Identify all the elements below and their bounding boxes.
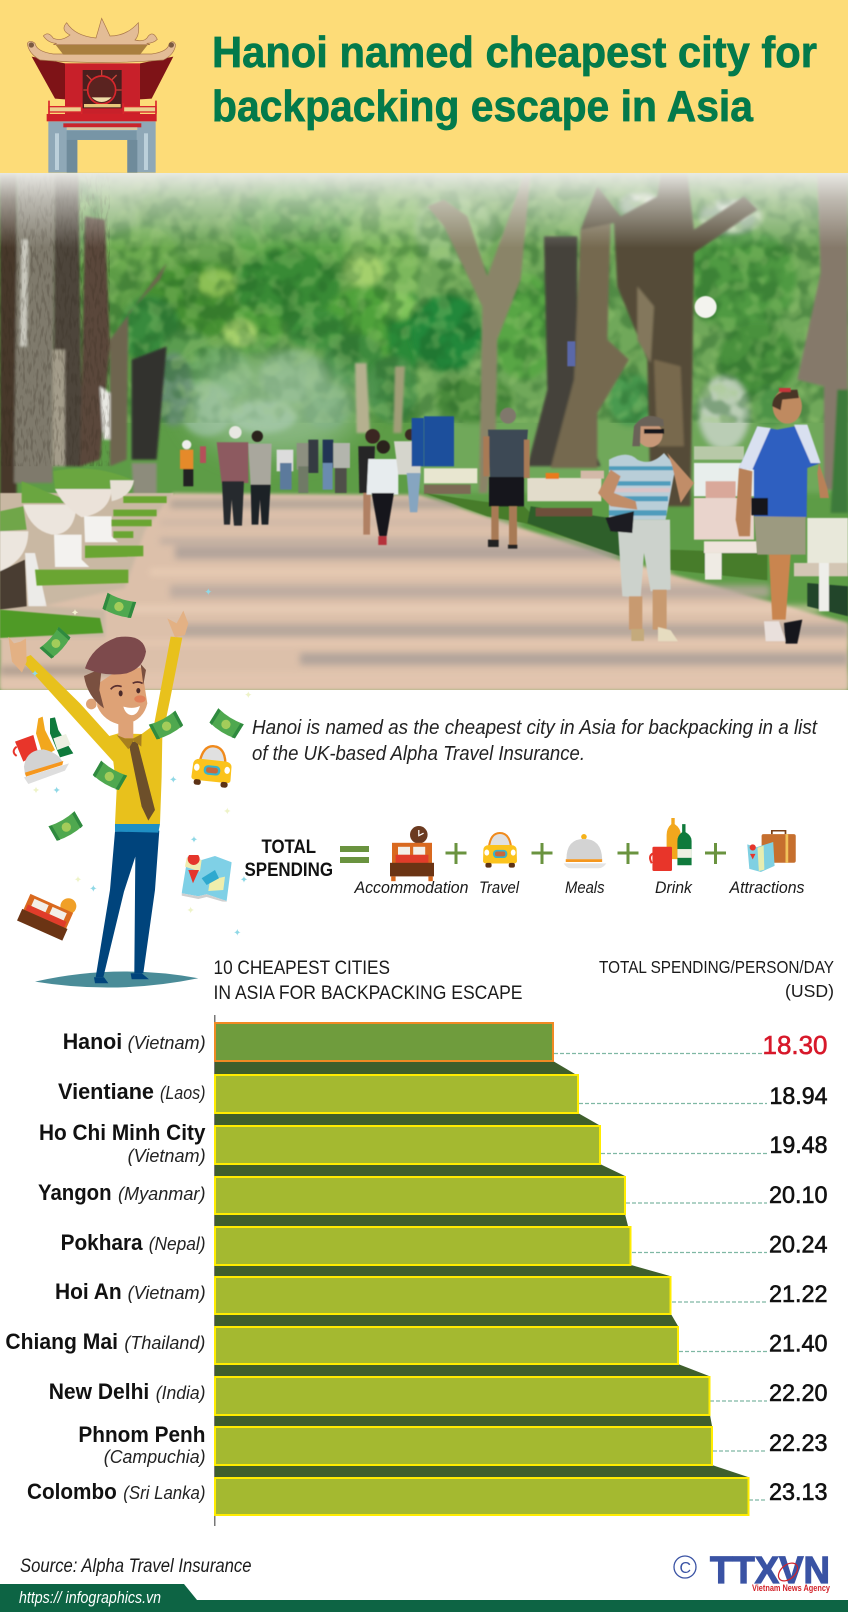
- city labels: Pokhara: [61, 1230, 143, 1255]
- city labels: (Laos): [160, 1083, 206, 1103]
- side hair: [84, 664, 146, 708]
- city labels: (Vietnam): [128, 1033, 206, 1053]
- item labels: [354, 879, 804, 897]
- intro text: Hanoi is named as the cheapest city in Asia for backpacking in a list: [252, 717, 818, 739]
- city labels: (Vietnam): [128, 1146, 206, 1166]
- column heading: [599, 957, 834, 1001]
- eyes, brows, nose, smile: [111, 682, 146, 715]
- logo: TTXVN Vietnam News Agency: Vietnam News Agency: [752, 1583, 830, 1593]
- total spending equation: [244, 818, 804, 897]
- item labels: Attractions: [729, 879, 804, 897]
- woman in white shirt: [377, 440, 390, 454]
- chart heading: 10 CHEAPEST CITIES: [214, 958, 390, 979]
- city labels: Chiang Mai: [5, 1329, 118, 1354]
- man in red shirt: [229, 426, 242, 439]
- far-avenue haze: [190, 355, 360, 455]
- city labels: Vientiane: [58, 1079, 154, 1104]
- crowd: [180, 450, 193, 469]
- item labels: Drink: [655, 879, 693, 897]
- photo: tree-lined walkway by the lake in Hanoi: [0, 166, 848, 690]
- icon: car: [191, 744, 234, 788]
- source: Source: Alpha Travel Insurance: [20, 1556, 252, 1577]
- column heading: (USD): [785, 981, 834, 1001]
- left ground under planters: [0, 493, 173, 640]
- bar: Chiang Mai: [215, 1327, 678, 1364]
- icon: bed with clock: [17, 882, 79, 941]
- city labels: Phnom Penh: [78, 1422, 205, 1447]
- item labels: Accommodation: [354, 879, 468, 897]
- plus signs: [446, 843, 726, 864]
- title: backpacking escape in Asia: [212, 82, 753, 131]
- leader lines: [554, 1054, 767, 1500]
- values: [762, 1030, 828, 1506]
- bar: Ho Chi Minh City: [215, 1126, 600, 1164]
- shirt and arms: [21, 637, 182, 824]
- man with light shirt: [404, 428, 412, 441]
- woman in striped shirt: [617, 520, 671, 598]
- city labels: (Nepal): [149, 1234, 206, 1254]
- sparkles: [32, 588, 252, 936]
- bar: Hoi An: [215, 1277, 670, 1314]
- logo: TTXVN Vietnam News Agency: C: [680, 1560, 691, 1577]
- shadow: [35, 972, 198, 988]
- ground: [0, 493, 848, 690]
- city labels: Hanoi: [63, 1029, 122, 1054]
- values: 20.24: [769, 1232, 828, 1258]
- woman in dark top behind: [365, 429, 380, 444]
- footer band with website tab: [0, 1584, 848, 1612]
- city labels: Hoi An: [55, 1279, 122, 1304]
- foliage texture: [78, 185, 825, 423]
- face: [96, 667, 147, 725]
- bar: New Delhi: [215, 1377, 710, 1415]
- item labels: Travel: [479, 879, 520, 897]
- character: happy man with arms raised and flying money and icons: [8, 588, 252, 988]
- city labels: (Thailand): [124, 1333, 205, 1353]
- planters: [22, 469, 132, 503]
- axis: [214, 1015, 216, 1526]
- city labels: Ho Chi Minh City: [39, 1120, 206, 1145]
- man in grey shirt: [252, 431, 263, 442]
- grass: [35, 496, 167, 586]
- total spending label: SPENDING: [244, 859, 333, 881]
- icon: accommodation: [390, 826, 434, 881]
- title: Hanoi named cheapest city for: [212, 28, 817, 77]
- icon: travel: [483, 833, 517, 868]
- city labels: New Delhi: [49, 1379, 149, 1404]
- values: 18.30: [762, 1030, 828, 1060]
- total spending label: TOTAL: [262, 836, 316, 858]
- item labels: Meals: [565, 879, 604, 897]
- intro text: [252, 717, 818, 765]
- icon: attractions: [747, 831, 796, 872]
- icon: meals: [564, 834, 606, 868]
- values: 21.22: [769, 1281, 828, 1308]
- city labels: (Sri Lanka): [123, 1483, 206, 1503]
- neck: [118, 722, 133, 738]
- intro text: of the UK-based Alpha Travel Insurance.: [252, 743, 585, 765]
- city labels: (India): [156, 1383, 206, 1403]
- city labels: (Myanmar): [118, 1184, 206, 1204]
- bar: Vientiane: [215, 1075, 578, 1113]
- city labels: Colombo: [27, 1479, 117, 1504]
- city labels: Yangon: [38, 1180, 112, 1205]
- city labels: (Campuchia): [104, 1447, 206, 1467]
- chart heading: IN ASIA FOR BACKPACKING ESCAPE: [214, 983, 522, 1004]
- hands: [8, 637, 27, 673]
- values: 21.40: [769, 1330, 828, 1358]
- tie: [128, 742, 155, 821]
- ear: [86, 699, 97, 709]
- total spending label: [244, 836, 333, 881]
- bar: Pokhara: [215, 1227, 630, 1265]
- top fade: [0, 173, 848, 248]
- icon: drink: [650, 818, 692, 871]
- values: 20.10: [769, 1182, 828, 1209]
- city labels: (Vietnam): [128, 1283, 206, 1303]
- header banner background: [0, 0, 848, 174]
- bar: Hanoi: [215, 1023, 553, 1061]
- title: [212, 28, 817, 131]
- bar chart: [5, 1015, 827, 1526]
- man from behind: [500, 408, 516, 424]
- values: 23.13: [769, 1479, 828, 1506]
- values: 18.94: [770, 1083, 828, 1110]
- bar: Yangon: [215, 1177, 625, 1214]
- icon: food and drink: [14, 717, 73, 784]
- icon: Temple of Literature gate: [27, 18, 176, 173]
- bar: Phnom Penh: [215, 1427, 712, 1465]
- footer band with website tab: https:// infographics.vn: [19, 1588, 161, 1607]
- trousers: [96, 831, 159, 977]
- man in blue shirt: [754, 516, 806, 555]
- bench and tables: [424, 468, 477, 483]
- hair: [85, 637, 146, 675]
- values: 19.48: [770, 1132, 828, 1159]
- money bills: [40, 593, 244, 842]
- chart heading: [214, 958, 522, 1004]
- values: 22.23: [769, 1430, 828, 1457]
- values: 22.20: [769, 1380, 828, 1407]
- icon: map: [182, 853, 232, 903]
- equals sign: [340, 846, 369, 863]
- dark step bands: [215, 1061, 748, 1477]
- logo: TTXVN Vietnam News Agency: TTXVN: [710, 1550, 830, 1592]
- city labels: [5, 1029, 206, 1504]
- belt: [115, 824, 160, 833]
- bar: Colombo: [215, 1478, 748, 1515]
